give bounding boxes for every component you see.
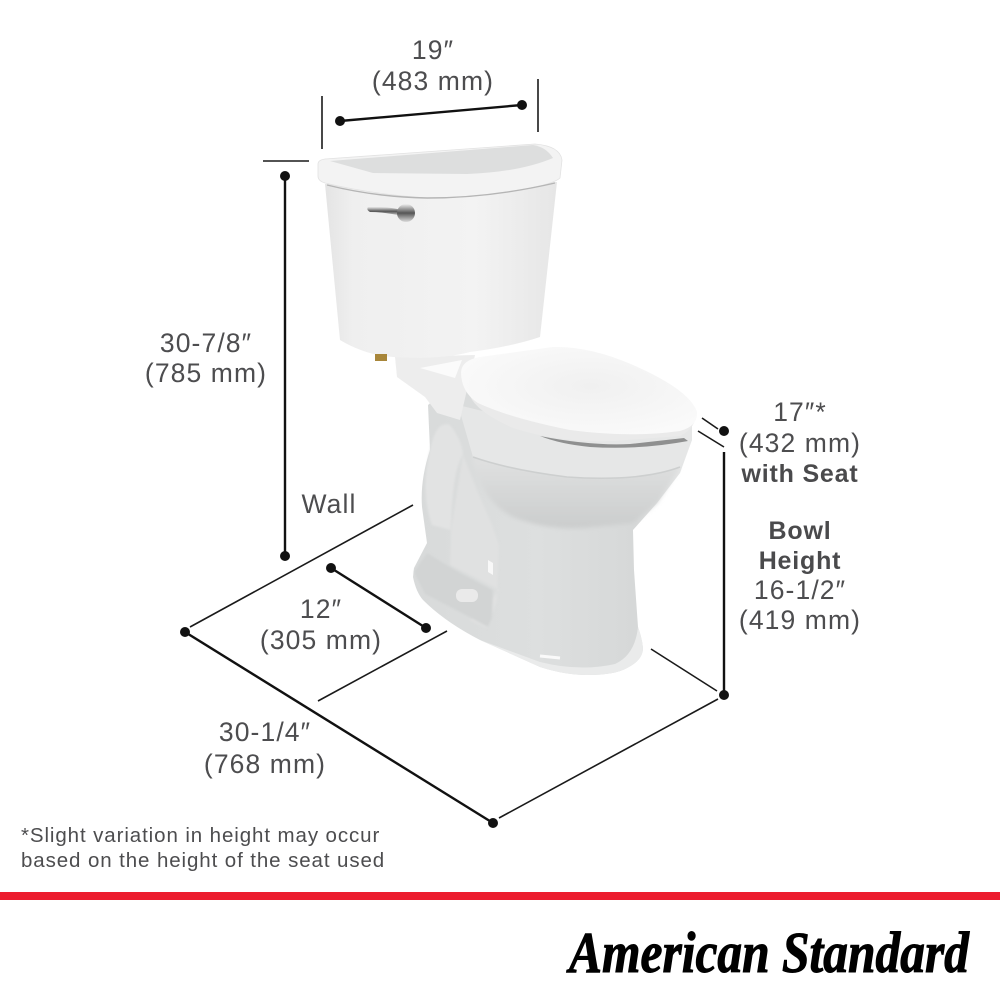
footnote: *Slight variation in height may occur bbox=[21, 824, 380, 847]
label: bowl height: Height bbox=[759, 547, 841, 575]
dimension: rough-in 12 in: 12″ bbox=[300, 594, 342, 624]
footnote bbox=[21, 824, 385, 872]
base foot recess bbox=[414, 553, 493, 627]
bowl belly shadow bbox=[473, 457, 680, 528]
water inlet bbox=[375, 354, 387, 361]
toilet photograph bbox=[318, 144, 697, 675]
dimension: bowl height lines bbox=[499, 418, 729, 818]
red divider band bbox=[0, 892, 1000, 900]
trapway bbox=[425, 424, 463, 530]
toilet bowl and base bbox=[395, 355, 692, 675]
rim bbox=[458, 405, 692, 478]
dimension: depth 30-1/4 in: 30-1/4″ bbox=[219, 717, 311, 747]
label: height with seat bbox=[739, 397, 861, 488]
seat cover bbox=[461, 347, 697, 434]
label: wall: Wall bbox=[302, 489, 356, 519]
dimension: depth 30-1/4 in: (768 mm) bbox=[204, 749, 326, 779]
dimension: tank width 19 in: 19″ bbox=[412, 35, 454, 65]
toilet tank bbox=[318, 144, 562, 361]
dimension: rough-in 12 in: (305 mm) bbox=[260, 625, 382, 655]
dimension: tank width 19 in: (483 mm) bbox=[372, 66, 494, 96]
label: height with seat: (432 mm) bbox=[739, 428, 861, 458]
toilet seat bbox=[461, 347, 697, 448]
base rim bbox=[423, 600, 643, 675]
label: bowl height: 16-1/2″ bbox=[754, 575, 846, 605]
dimension: overall height 30-7/8 in: 30-7/8″ bbox=[160, 328, 252, 358]
flush handle bbox=[367, 204, 415, 222]
label: height with seat: with Seat bbox=[741, 460, 858, 488]
dimension: overall height 30-7/8 in bbox=[145, 161, 309, 561]
dimension: rough-in 12 in bbox=[260, 563, 431, 655]
label: height with seat: 17″* bbox=[773, 397, 827, 427]
label: bowl height: (419 mm) bbox=[739, 605, 861, 635]
dimension: overall height 30-7/8 in: (785 mm) bbox=[145, 358, 267, 388]
seat ring lip bbox=[470, 396, 695, 441]
footnote: based on the height of the seat used bbox=[21, 849, 385, 872]
dimension: depth 30-1/4 in bbox=[180, 505, 498, 828]
dimension: tank width 19 in bbox=[322, 35, 538, 149]
label: bowl height bbox=[739, 517, 861, 635]
neck bbox=[395, 355, 475, 420]
seat gap shadow bbox=[540, 436, 688, 448]
label: bowl height: Bowl bbox=[769, 517, 831, 545]
